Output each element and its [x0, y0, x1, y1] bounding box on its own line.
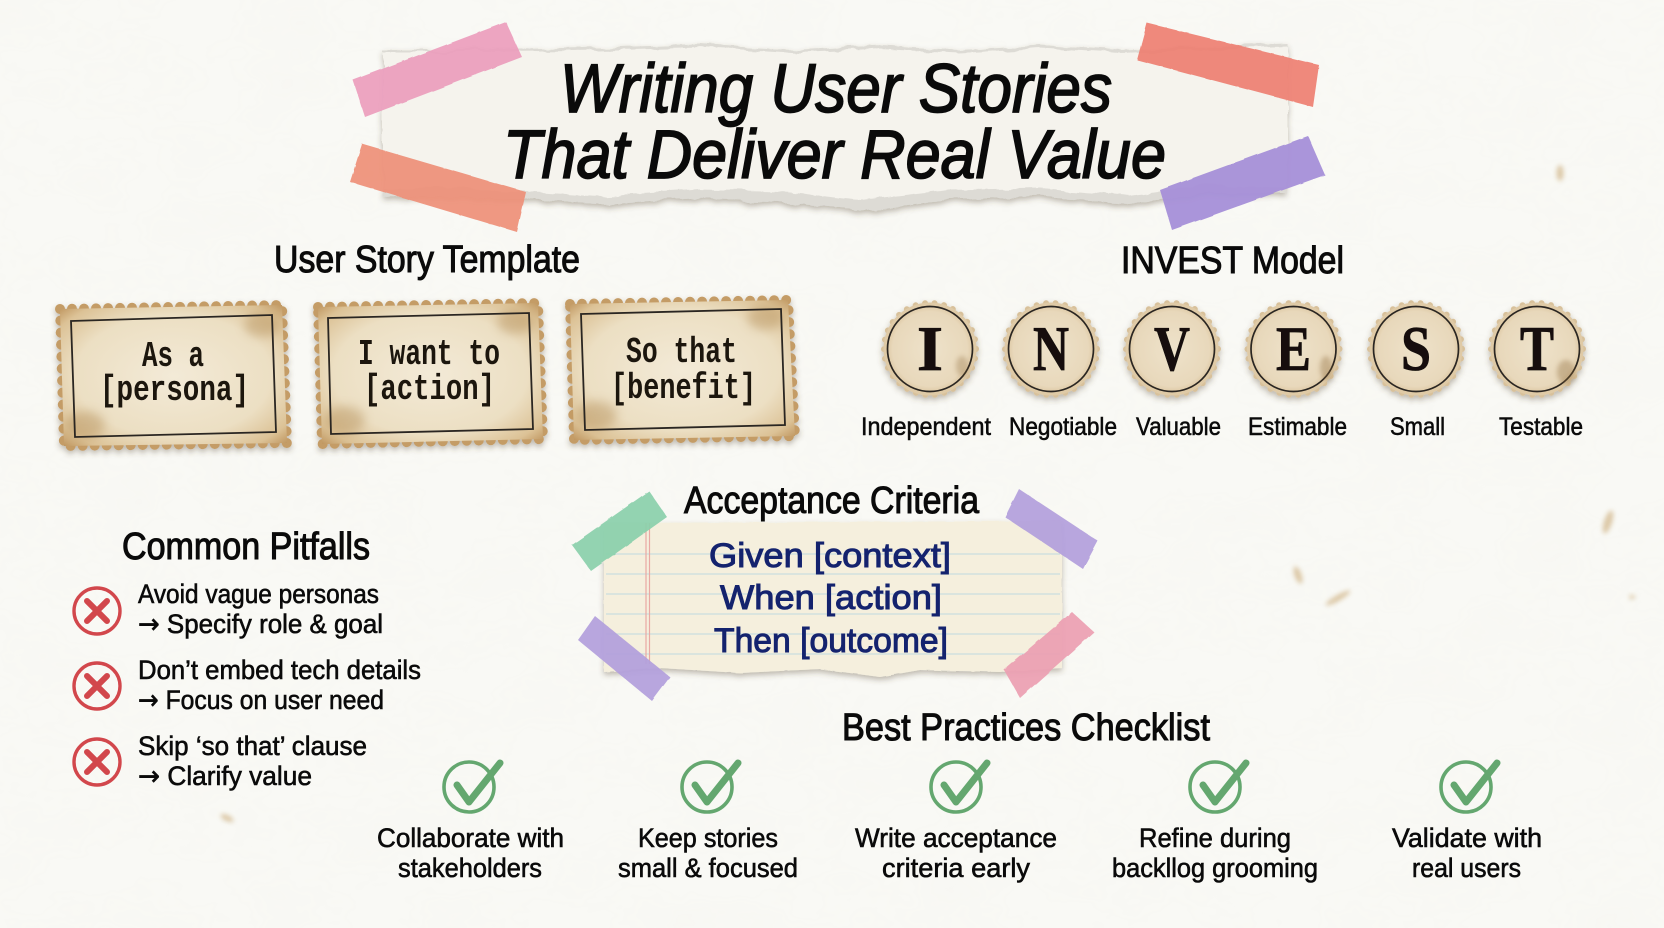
item label: collaborate: Collaborate with [377, 823, 564, 853]
invest labels: Estimable [1248, 413, 1347, 441]
stamp: as a persona: As a [142, 336, 204, 377]
item label: keep stories: small & focused [618, 853, 798, 883]
panel: common pitfalls [74, 526, 421, 792]
item label: keep stories: Keep stories [638, 823, 778, 853]
washi tape: purple top right [1005, 489, 1098, 569]
icon: green check [931, 762, 987, 812]
badge: V: V [1154, 314, 1190, 384]
badge: S: S [1401, 314, 1431, 384]
icon: red x [74, 663, 120, 709]
stamp: i want to action: I want to [358, 334, 500, 375]
item label: refine: Refine during [1139, 823, 1291, 853]
lined note paper [604, 521, 1062, 677]
pitfall two text: Don’t embed tech details [138, 655, 421, 685]
invest labels: Negotiable [1009, 413, 1117, 441]
badge: T [1490, 302, 1584, 396]
title text: Writing User Stories [560, 50, 1112, 127]
badge: N [1004, 302, 1098, 396]
decorative paper stains [219, 165, 1635, 824]
washi tape: pink [353, 22, 522, 117]
icon: red x [74, 588, 120, 634]
item label: refine [1112, 823, 1318, 883]
icon: red x [74, 739, 120, 785]
pitfall two text: → Focus on user need [138, 685, 384, 716]
stamp: as a persona [60, 305, 287, 446]
item label: keep stories [618, 823, 798, 883]
heading: acceptance criteria: Acceptance Criteria [684, 480, 980, 522]
badge: I [884, 302, 976, 396]
pitfall two text [138, 655, 421, 716]
washi tape: coral [350, 144, 526, 232]
stamp: i want to action [318, 303, 543, 444]
pitfall one text: → Specify role & goal [138, 609, 383, 640]
item label: write acceptance: criteria early [882, 853, 1030, 883]
item label: validate [1392, 823, 1542, 883]
given when then text: When [action] [720, 579, 942, 617]
icon: green check [1190, 762, 1246, 812]
icon: green check [444, 762, 500, 812]
item label: validate: real users [1412, 853, 1521, 883]
panel: best practices checklist [377, 707, 1542, 883]
badge: V [1126, 302, 1218, 396]
item label: validate: Validate with [1392, 823, 1542, 853]
heading: common pitfalls: Common Pitfalls [122, 526, 370, 568]
item label: refine: backllog grooming [1112, 853, 1318, 883]
item label: collaborate: stakeholders [398, 853, 542, 883]
item label: write acceptance: Write acceptance [855, 823, 1057, 853]
panel: invest model badges [861, 302, 1584, 441]
badge: E: E [1276, 314, 1311, 384]
heading: invest model: INVEST Model [1121, 240, 1344, 282]
panel: user story template stamps [60, 300, 795, 446]
title text: That Deliver Real Value [503, 116, 1166, 193]
pitfall three text: → Clarify value [138, 761, 312, 792]
given when then text [709, 537, 951, 660]
badge: N: N [1033, 314, 1069, 384]
badge: I: I [917, 314, 943, 384]
pitfall one text [138, 579, 383, 640]
invest labels: Independent [861, 413, 991, 441]
washi tape: purple [1160, 136, 1325, 230]
badge: E [1247, 302, 1340, 396]
icon: green check [1441, 762, 1497, 812]
badge: T: T [1520, 314, 1554, 384]
stamp: so that benefit [570, 300, 795, 440]
pitfall one text: Avoid vague personas [138, 579, 379, 609]
stamp: i want to action: [action] [364, 369, 495, 410]
stamp: so that benefit: [benefit] [611, 368, 756, 409]
invest labels [861, 413, 1583, 441]
panel: acceptance criteria [572, 480, 1098, 701]
stamp: as a persona: [persona] [100, 370, 249, 411]
icon: green check [682, 762, 738, 812]
item label: write acceptance [855, 823, 1057, 883]
badge: S [1370, 302, 1462, 396]
invest labels: Testable [1499, 413, 1583, 441]
item label: collaborate [377, 823, 564, 883]
heading: best practices checklist: Best Practices Checklist [842, 707, 1210, 749]
title text [503, 50, 1166, 193]
invest labels: Valuable [1136, 413, 1221, 441]
stamp: so that benefit: So that [626, 332, 737, 373]
washi tape: pink bottom right [1004, 612, 1094, 698]
invest labels: Small [1390, 413, 1445, 441]
given when then text: Then [outcome] [714, 622, 948, 660]
pitfall three text: Skip ‘so that’ clause [138, 731, 367, 761]
given when then text: Given [context] [709, 537, 951, 575]
washi tape: purple bottom left [578, 616, 670, 701]
washi tape: green [572, 491, 667, 571]
title banner [350, 22, 1325, 232]
heading: user story template: User Story Template [274, 239, 580, 281]
pitfall three text [138, 731, 367, 792]
torn paper strip [383, 44, 1288, 210]
washi tape: red [1137, 23, 1319, 107]
